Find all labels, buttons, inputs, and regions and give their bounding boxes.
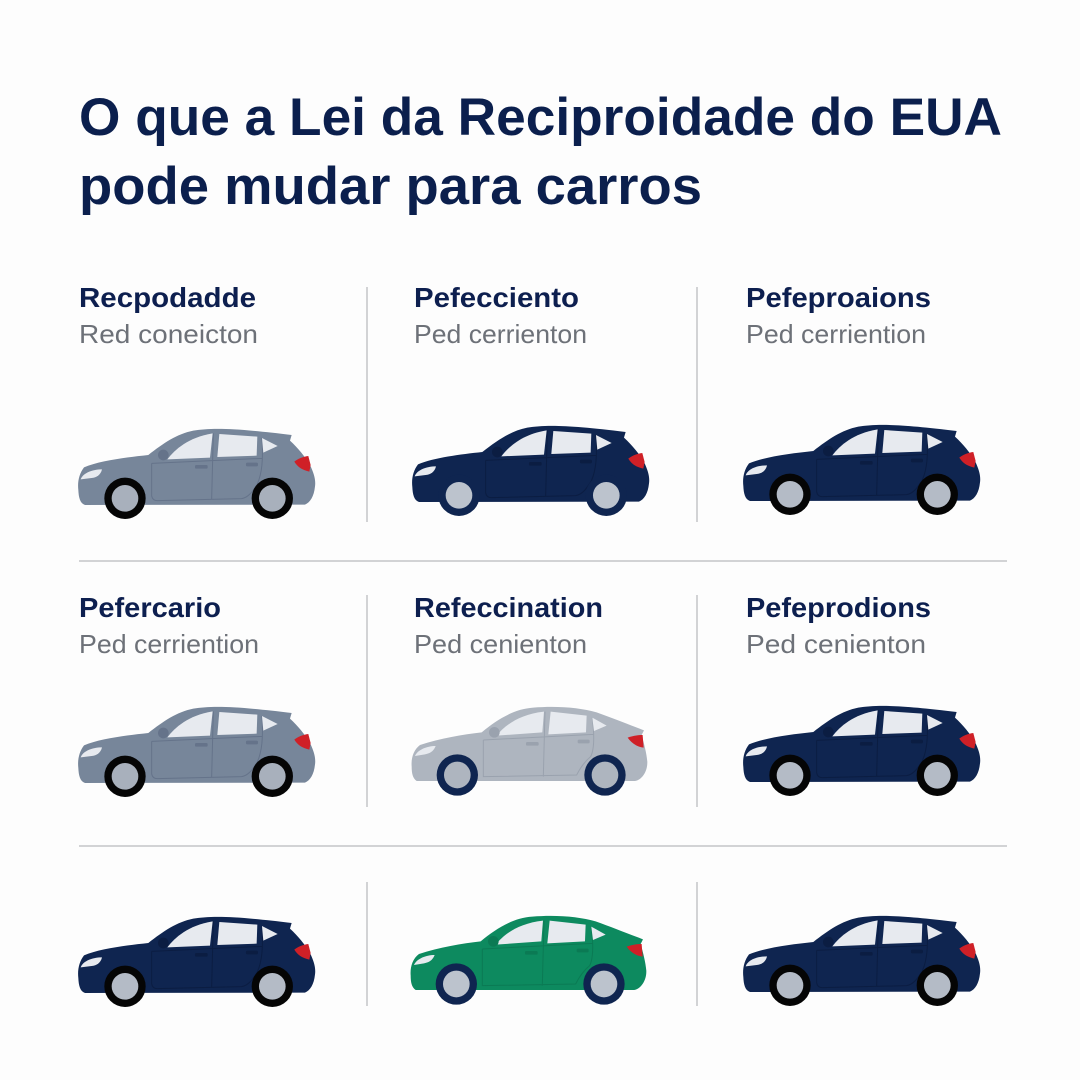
panel: Pefercario: Pefercario: [79, 592, 221, 623]
title: pode mudar para carros: [79, 157, 702, 216]
panel: Pefeproaions: [743, 282, 980, 515]
panel: Pefeproaions: Ped cerriention: [746, 319, 926, 349]
panel: Refeccination: Ped cenienton: [414, 629, 587, 659]
icon: silver sedan: [412, 707, 647, 796]
panel: Pefecciento: [412, 282, 649, 516]
panel: Pefercario: Ped cerriention: [79, 629, 259, 659]
icon: navy hatchback: [743, 706, 980, 796]
title: [79, 88, 1002, 216]
panel: Pefercario: [78, 592, 315, 797]
panel: Pefeproaions: Pefeproaions: [746, 282, 931, 313]
panel: Pefeprodions: [743, 592, 980, 796]
title: O que a Lei da Reciproidade do EUA: [79, 88, 1002, 147]
panel: Refeccination: [412, 592, 647, 796]
icon: grey hatchback: [78, 429, 315, 519]
icon: navy hatchback, bottom right: [743, 916, 980, 1006]
panel: Pefecciento: Ped cerrienton: [414, 319, 587, 349]
panel: Pefeprodions: Ped cenienton: [746, 629, 926, 659]
icon: navy hatchback, bottom left: [78, 917, 315, 1007]
icon: navy hatchback: [412, 426, 649, 516]
icon: green sedan, bottom centre: [411, 916, 646, 1005]
panel: Recpodadde: Red coneicton: [79, 319, 258, 349]
panel: Recpodadde: Recpodadde: [79, 282, 256, 313]
panel: Pefeprodions: Pefeprodions: [746, 592, 931, 623]
panel: Recpodadde: [78, 282, 315, 519]
icon: grey hatchback: [78, 707, 315, 797]
grid dividers: [79, 287, 1007, 1006]
panel: Refeccination: Refeccination: [414, 592, 603, 623]
icon: navy hatchback with black tyres: [743, 425, 980, 515]
panel: Pefecciento: Pefecciento: [414, 282, 579, 313]
